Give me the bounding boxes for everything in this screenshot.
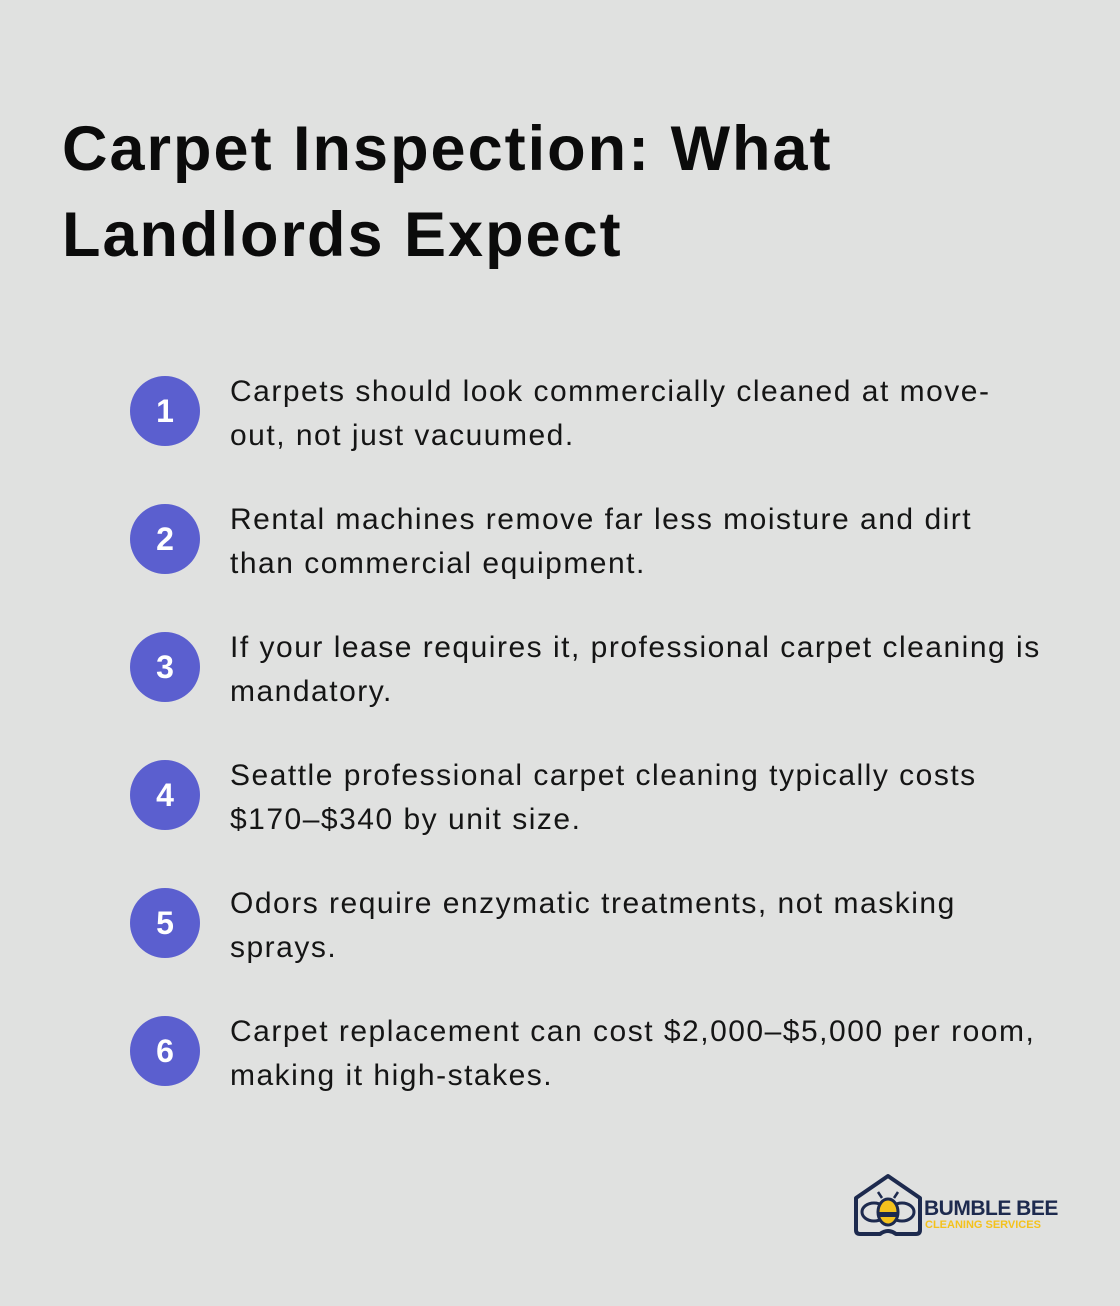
item 6: 6 — [156, 1033, 174, 1069]
icon: bee house — [854, 1174, 922, 1236]
title: Carpet Inspection: What — [62, 114, 833, 184]
item 1: 1 — [156, 393, 174, 429]
item 1: out, not just vacuumed. — [230, 419, 575, 452]
item 5: sprays. — [230, 931, 337, 964]
item 2 — [130, 503, 972, 580]
item 3: mandatory. — [230, 675, 393, 708]
title: Landlords Expect — [62, 200, 623, 270]
item 3: If your lease requires it, professional carpet cleaning is — [230, 631, 1041, 664]
item 5: Odors require enzymatic treatments, not masking — [230, 887, 956, 920]
item 3: 3 — [156, 649, 174, 685]
item 2: Rental machines remove far less moisture and dirt — [230, 503, 972, 536]
logo text: BUMBLE BEE — [924, 1197, 1058, 1220]
item 4: 4 — [156, 777, 174, 813]
item 6: Carpet replacement can cost $2,000–$5,000 per room, — [230, 1015, 1035, 1048]
item 1: Carpets should look commercially cleaned at move- — [230, 375, 990, 408]
item 4: $170–$340 by unit size. — [230, 803, 581, 836]
title — [62, 114, 833, 270]
item 6: making it high-stakes. — [230, 1059, 553, 1092]
logo: CLEANING SERVICES — [925, 1219, 1041, 1231]
item 5: 5 — [156, 905, 174, 941]
item 3 — [130, 631, 1041, 708]
item 2: than commercial equipment. — [230, 547, 646, 580]
item 2: 2 — [156, 521, 174, 557]
item 6 — [130, 1015, 1035, 1092]
item 5 — [130, 887, 956, 964]
item 1 — [130, 375, 990, 452]
item 4: Seattle professional carpet cleaning typically costs — [230, 759, 977, 792]
logo — [854, 1174, 1058, 1236]
item 4 — [130, 759, 977, 836]
